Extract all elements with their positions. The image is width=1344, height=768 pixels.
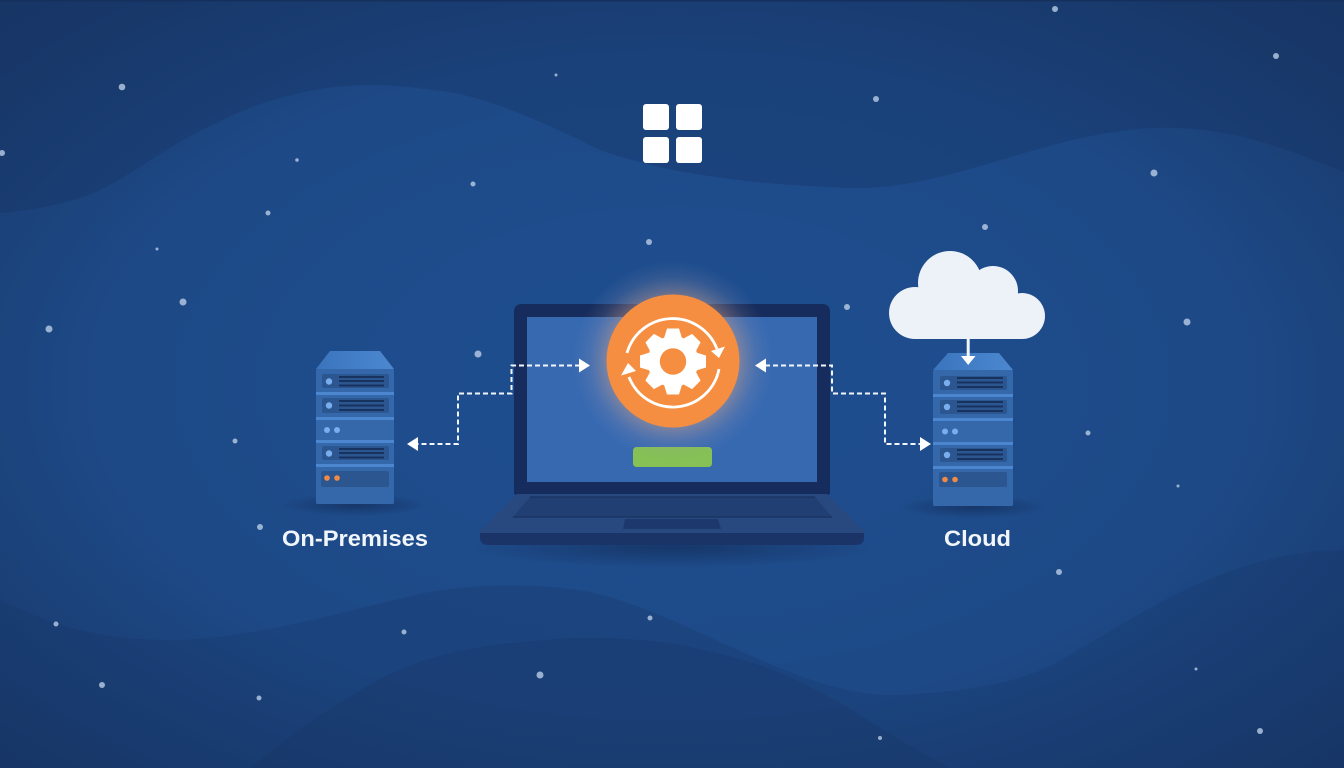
arrow: laptop to cloud server (755, 358, 931, 451)
icon: circular arrows (621, 319, 725, 407)
arrow: cloud to server (961, 339, 976, 365)
laptop trackpad (623, 519, 721, 529)
laptop keyboard (513, 497, 832, 517)
arrow: laptop to on-premises (407, 358, 590, 451)
green status button (633, 447, 712, 467)
icon: windows logo (643, 104, 702, 163)
label: cloud: Cloud (944, 526, 1011, 551)
icon: cloud (889, 251, 1045, 339)
laptop (467, 304, 877, 568)
gear badge (573, 261, 773, 461)
server: on-premises (280, 351, 430, 516)
icon: gear (640, 328, 706, 394)
server: cloud (898, 353, 1048, 518)
label: on-premises: On-Premises (282, 526, 428, 551)
